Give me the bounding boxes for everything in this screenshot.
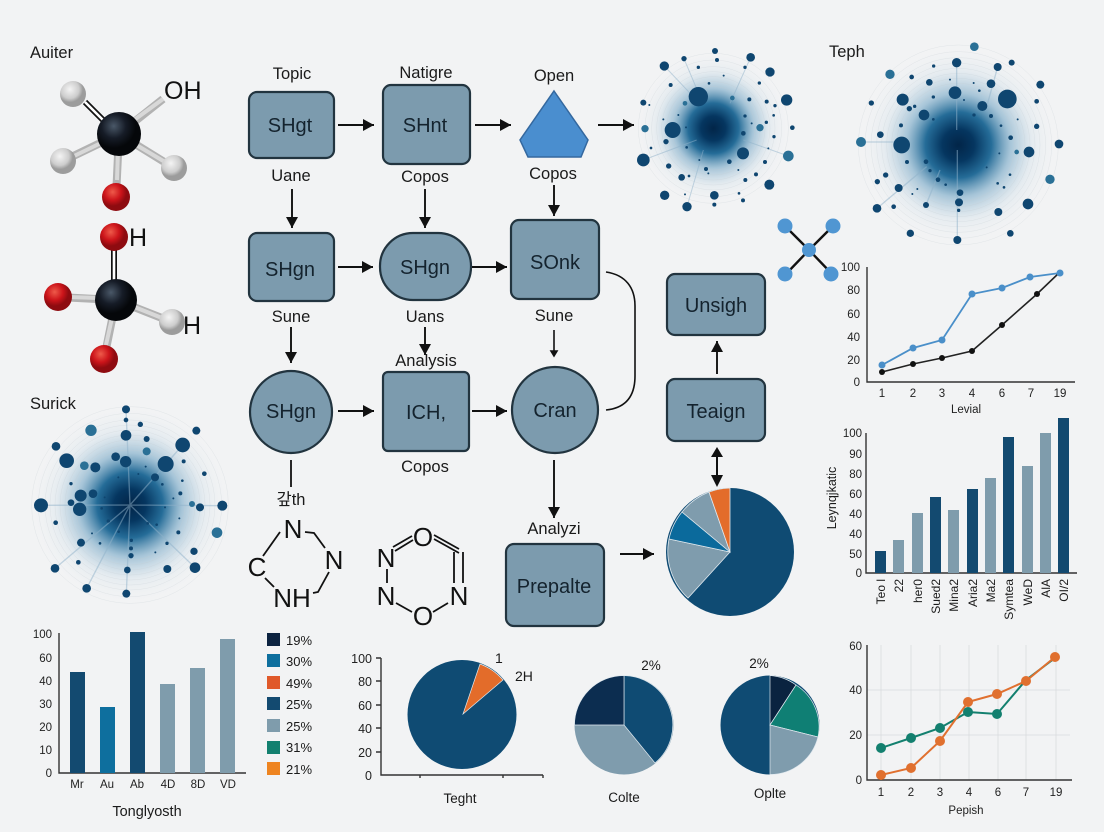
pie chart with axis: 60 — [358, 699, 372, 713]
bar chart: left: 60 — [39, 653, 52, 665]
bar chart: right: 90 — [849, 449, 862, 461]
pie chart: Colte: Colte — [608, 790, 640, 805]
bar chart: left: Mr — [70, 779, 84, 791]
line chart: top right: 2 — [910, 388, 916, 400]
line chart: top right: Levial — [951, 404, 981, 416]
node: Cran — [512, 367, 598, 453]
bar chart: right: 40 — [849, 529, 862, 541]
line chart: bottom right: 3 — [937, 787, 943, 799]
pie chart with axis: Teght — [443, 791, 477, 806]
bar chart: right: OI/2 — [1057, 579, 1071, 602]
bar chart: left — [33, 629, 246, 820]
node: SHgn stadium — [380, 233, 471, 300]
bar chart: right: her0 — [911, 579, 925, 603]
node: SHnt: SHnt — [403, 115, 448, 137]
node: Unsight — [667, 274, 765, 335]
chemical ring right: N — [377, 543, 395, 573]
node: SHgn row two — [249, 233, 334, 301]
molecule: second: H — [183, 312, 201, 340]
pie chart with axis: 100 — [351, 652, 372, 666]
legend: 31% — [286, 740, 312, 755]
label: Auiter: Auiter — [30, 44, 74, 62]
chemical ring left: NH — [273, 583, 311, 613]
arrows — [291, 125, 723, 554]
line chart: top right: 20 — [847, 355, 860, 367]
line chart: bottom right: 19 — [1050, 787, 1062, 799]
pie chart with axis: 2H — [515, 668, 533, 684]
line chart: bottom right: 1 — [878, 787, 884, 799]
pie chart with axis: 0 — [365, 769, 372, 783]
bar chart: right: 0 — [856, 568, 862, 580]
node: Cran: Cran — [533, 400, 577, 422]
bar chart: right: Aria2 — [966, 579, 980, 607]
bar chart: left: VD — [220, 779, 236, 791]
line chart: top right: 1 — [879, 388, 885, 400]
node: SHgt — [249, 92, 334, 158]
flow labels: Natigre — [399, 64, 453, 82]
line chart: top right: 19 — [1054, 388, 1066, 400]
molecule: second: H — [129, 224, 147, 252]
bar chart: right: Ma2 — [984, 579, 998, 602]
line chart: bottom right: 7 — [1023, 787, 1029, 799]
chemical ring left: N — [284, 514, 302, 544]
pie chart with axis: 20 — [358, 746, 372, 760]
bar chart: right: WeD — [1021, 579, 1035, 605]
node: Prepalte: Prepalte — [517, 576, 591, 598]
bar chart: right: 80 — [849, 469, 862, 481]
bar chart: right: Sued2 — [929, 579, 943, 614]
line chart: top right: 0 — [854, 377, 860, 389]
node: Prepalte — [506, 544, 604, 626]
pie chart with axis: 1 — [495, 650, 503, 666]
bar chart: left: 100 — [33, 629, 52, 641]
flow labels: Topic — [273, 65, 311, 83]
line chart: top right: 40 — [847, 332, 860, 344]
label: Surick: Surick — [30, 395, 77, 413]
bar chart: right: Leynqjkatic — [825, 467, 839, 529]
bar chart: left: 10 — [39, 745, 52, 757]
network: top centre — [637, 48, 795, 211]
node: blue pentagon — [520, 91, 588, 157]
bar chart: right: 22 — [892, 579, 906, 592]
node: SHnt — [383, 85, 470, 164]
flow labels: Open — [534, 67, 574, 85]
bar chart: right: 100 — [843, 428, 862, 440]
pie chart: Oplte: 2% — [749, 656, 769, 671]
bar chart: left: 40 — [39, 676, 52, 688]
flow labels: Uane — [271, 167, 311, 185]
line chart: top right: 100 — [841, 262, 860, 274]
flow labels: Analysis — [395, 352, 457, 370]
line chart: bottom right: 60 — [849, 641, 862, 653]
line chart: top right: 60 — [847, 309, 860, 321]
line chart: top right: 7 — [1028, 388, 1034, 400]
flow labels: Copos — [529, 165, 577, 183]
node: ICH: ICH, — [406, 402, 446, 424]
chemical ring left: N — [325, 545, 343, 575]
pie chart with axis: 80 — [358, 675, 372, 689]
node: SHgn circle — [250, 371, 332, 453]
bar chart: right: Teo l — [874, 579, 888, 604]
line chart: bottom right: Pepish — [948, 805, 984, 817]
flow labels: Sune — [535, 307, 573, 325]
legend: 25% — [286, 697, 312, 712]
pie chart: Oplte — [720, 656, 820, 801]
legend — [267, 633, 312, 777]
chemical ring left — [248, 514, 343, 613]
line chart: bottom right: 40 — [849, 685, 862, 697]
node: ICH — [383, 372, 469, 451]
bar chart: left: 4D — [161, 779, 175, 791]
bar chart: left: Tonglyosth — [112, 804, 182, 820]
flow labels: Sune — [272, 308, 310, 326]
node: SHgt: SHgt — [268, 115, 313, 137]
flow labels: Copos — [401, 458, 449, 476]
bar chart: left: 30 — [39, 699, 52, 711]
bar chart: left: 20 — [39, 722, 52, 734]
line chart: bottom right: 6 — [995, 787, 1001, 799]
chemical ring right — [377, 522, 468, 631]
chemical ring right: O — [413, 522, 433, 552]
line chart: top right — [841, 262, 1075, 416]
line chart: bottom right: 0 — [856, 775, 862, 787]
bar chart: right: 60 — [849, 489, 862, 501]
bar chart: right: 50 — [849, 549, 862, 561]
node: SHgn stadium: SHgn — [400, 257, 450, 279]
node: Unsight: Unsigh — [685, 295, 747, 317]
chemical ring right: N — [450, 581, 468, 611]
line chart: bottom right: 2 — [908, 787, 914, 799]
bar chart: left: Au — [100, 779, 114, 791]
molecule: top left — [50, 77, 202, 211]
molecule: second — [44, 223, 201, 373]
bar chart: right: AlA — [1039, 579, 1053, 598]
network: top right — [856, 42, 1063, 245]
node: SOnk: SOnk — [530, 252, 581, 274]
node: SOnk — [511, 220, 599, 299]
label: Teph: Teph — [829, 43, 865, 61]
bar chart: right: Symtea — [1002, 579, 1016, 620]
pie chart: Colte: 2% — [641, 658, 661, 673]
bar chart: left: 0 — [46, 768, 52, 780]
flow labels — [271, 64, 581, 538]
node: SHgn row two: SHgn — [265, 259, 315, 281]
legend: 19% — [286, 633, 312, 648]
flow labels: 갚th — [277, 490, 305, 509]
bar chart: right: 40 — [849, 509, 862, 521]
pie chart: centre right — [666, 488, 794, 616]
line chart: top right: 6 — [999, 388, 1005, 400]
node: Teaign: Teaign — [687, 401, 745, 423]
legend: 21% — [286, 762, 312, 777]
flow labels: Analyzi — [527, 520, 581, 538]
line chart: bottom right — [849, 641, 1072, 817]
pie chart with axis: 40 — [358, 722, 372, 736]
line chart: top right: 3 — [939, 388, 945, 400]
flow labels: Copos — [401, 168, 449, 186]
node: SHgn circle: SHgn — [266, 401, 316, 423]
legend: 25% — [286, 719, 312, 734]
chemical ring left: C — [248, 552, 266, 582]
flow labels: Uans — [406, 308, 444, 326]
molecule: top left: OH — [164, 77, 202, 105]
line chart: bottom right: 4 — [966, 787, 973, 799]
pie chart with axis — [351, 650, 543, 806]
bar chart: left: Ab — [130, 779, 144, 791]
chemical ring right: O — [413, 601, 433, 631]
node: Teaign — [667, 379, 765, 441]
pie chart: Oplte: Oplte — [754, 786, 786, 801]
line chart: top right: 80 — [847, 285, 860, 297]
bar chart: left: 8D — [191, 779, 205, 791]
line chart: top right: 4 — [969, 388, 976, 400]
icon: small X molecule — [778, 218, 840, 282]
legend: 30% — [286, 654, 312, 669]
chemical ring right: N — [377, 581, 395, 611]
network: left — [30, 405, 230, 605]
legend: 49% — [286, 676, 312, 691]
bar chart: right: Mina2 — [947, 579, 961, 612]
line chart: bottom right: 20 — [849, 730, 862, 742]
pie chart: Colte — [574, 658, 674, 805]
bar chart: right — [825, 418, 1077, 620]
